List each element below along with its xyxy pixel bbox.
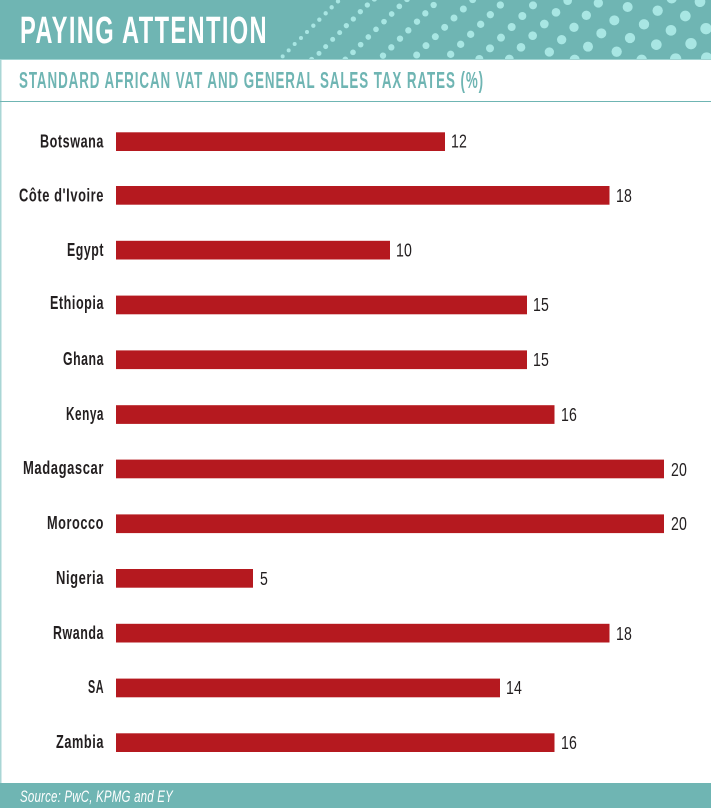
row: Madagascar: 20 bbox=[671, 459, 687, 480]
row: Botswana: Botswana bbox=[40, 132, 104, 152]
row: Morocco bbox=[47, 513, 687, 534]
row: Kenya: Kenya bbox=[66, 404, 104, 424]
row: Zambia bbox=[56, 732, 577, 753]
decorative dot pattern bbox=[281, 0, 711, 65]
row: Madagascar bbox=[23, 458, 687, 480]
footer band bbox=[0, 783, 711, 808]
row: Ethiopia: Ethiopia bbox=[50, 293, 104, 313]
row: Rwanda: 18 bbox=[616, 623, 632, 644]
row: Egypt bbox=[67, 240, 412, 260]
row: Côte d'Ivoire bbox=[19, 185, 632, 206]
row: Kenya: 16 bbox=[561, 404, 577, 425]
row: Nigeria bbox=[56, 568, 268, 589]
row: Côte d'Ivoire: 18 bbox=[616, 185, 632, 206]
row: SA: SA bbox=[88, 677, 104, 697]
row: Rwanda: Rwanda bbox=[53, 623, 104, 643]
row: Morocco: 20 bbox=[671, 513, 687, 534]
row: Ghana: Ghana bbox=[63, 349, 104, 369]
row: Morocco: Morocco bbox=[47, 513, 104, 533]
row: Ghana bbox=[63, 349, 549, 370]
row: Ghana: 15 bbox=[533, 349, 549, 370]
row: SA bbox=[88, 677, 522, 698]
row: Botswana bbox=[40, 130, 467, 152]
row: Egypt: Egypt bbox=[67, 240, 104, 260]
row: Nigeria: 5 bbox=[260, 568, 268, 589]
row: SA: 14 bbox=[506, 677, 522, 698]
row: Egypt: 10 bbox=[396, 240, 412, 260]
row: Nigeria: Nigeria bbox=[56, 568, 104, 588]
bar chart bbox=[19, 130, 687, 753]
row: Ethiopia bbox=[50, 293, 549, 315]
row: Rwanda bbox=[53, 623, 632, 644]
row: Kenya bbox=[66, 404, 577, 425]
row: Ethiopia: 15 bbox=[533, 294, 549, 315]
source note: Source: PwC, KPMG and EY bbox=[20, 787, 174, 806]
title: PAYING ATTENTION bbox=[20, 10, 268, 52]
row: Zambia: Zambia bbox=[56, 732, 104, 752]
row: Botswana: 12 bbox=[451, 130, 467, 152]
header band bbox=[0, 0, 711, 65]
row: Madagascar: Madagascar bbox=[23, 458, 104, 478]
row: Zambia: 16 bbox=[561, 732, 577, 753]
row: Côte d'Ivoire: Côte d'Ivoire bbox=[19, 186, 104, 206]
